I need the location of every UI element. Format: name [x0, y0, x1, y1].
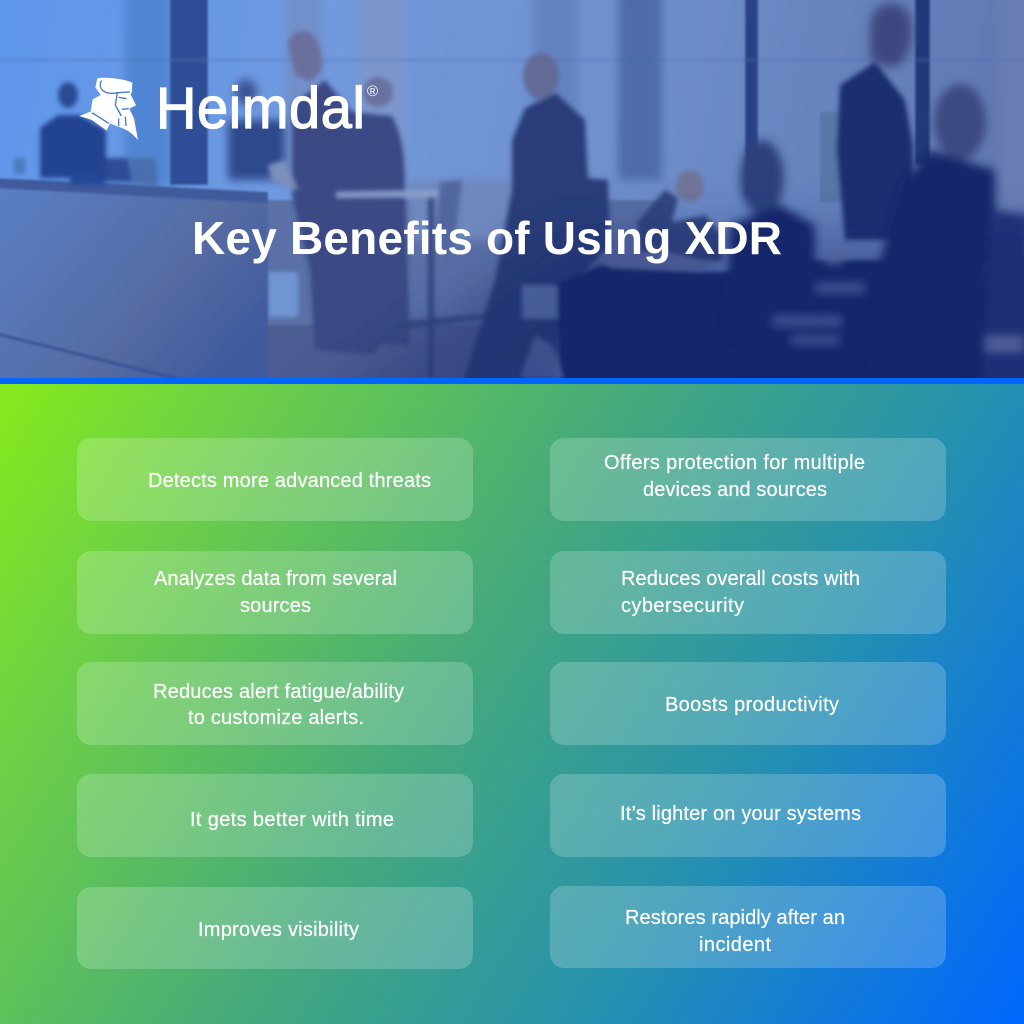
wordmark: Heimdal	[156, 76, 365, 141]
table and chair legs	[336, 180, 485, 377]
person: center standing man	[268, 31, 410, 355]
card: multiple devices: Offers protection for multiple	[604, 452, 865, 474]
person: left seated man	[40, 82, 106, 178]
registered mark: ®	[367, 83, 378, 100]
icon: viking head	[79, 78, 138, 140]
title: Key Benefits of Using XDR	[192, 212, 782, 264]
card: analyzes data: sources	[240, 595, 311, 617]
reception desk	[0, 186, 268, 385]
card: multiple devices	[550, 438, 946, 521]
card: better with time: It gets better with time	[190, 809, 394, 831]
card: restores rapidly: Restores rapidly after an	[625, 907, 845, 929]
card: lighter on systems	[550, 774, 946, 857]
card: visibility: Improves visibility	[198, 919, 359, 941]
card: productivity	[550, 662, 946, 745]
person: seated man with hand to head	[637, 170, 722, 262]
card: analyzes data: Analyzes data from several	[154, 568, 397, 590]
person: tall man at window	[837, 3, 913, 240]
card: better with time	[77, 774, 473, 857]
card: alert fatigue: to customize alerts.	[188, 707, 364, 729]
person: background man behind logo	[228, 79, 285, 180]
card: detects threats: Detects more advanced threats	[148, 470, 431, 492]
card: visibility	[77, 887, 473, 969]
card: detects threats	[77, 438, 473, 521]
card: lighter on systems: It’s lighter on your systems	[620, 803, 861, 825]
person: woman in black	[722, 136, 821, 274]
card: restores rapidly: incident	[699, 934, 771, 956]
floor	[268, 200, 668, 385]
blue divider band	[0, 378, 1024, 384]
card: reduces costs: cybersecurity	[621, 595, 744, 617]
dark table and foreground	[556, 257, 884, 378]
blurred desk items	[772, 245, 1024, 353]
header photo: blurred office scene with blue tint	[0, 0, 1024, 420]
card: reduces costs: Reduces overall costs with	[621, 568, 860, 590]
card: multiple devices: devices and sources	[643, 479, 827, 501]
card: restores rapidly	[550, 886, 946, 968]
person: standing man in dark suit	[462, 53, 610, 385]
lower gradient panel	[0, 384, 1024, 1024]
card: alert fatigue	[77, 662, 473, 745]
card: productivity: Boosts productivity	[665, 694, 839, 716]
logo: Heimdal	[79, 76, 378, 141]
card: alert fatigue: Reduces alert fatigue/ability	[153, 681, 404, 703]
person: right foreground man	[870, 84, 1024, 385]
card: reduces costs	[550, 551, 946, 634]
laptops on desk	[14, 158, 158, 186]
card: analyzes data	[77, 551, 473, 634]
